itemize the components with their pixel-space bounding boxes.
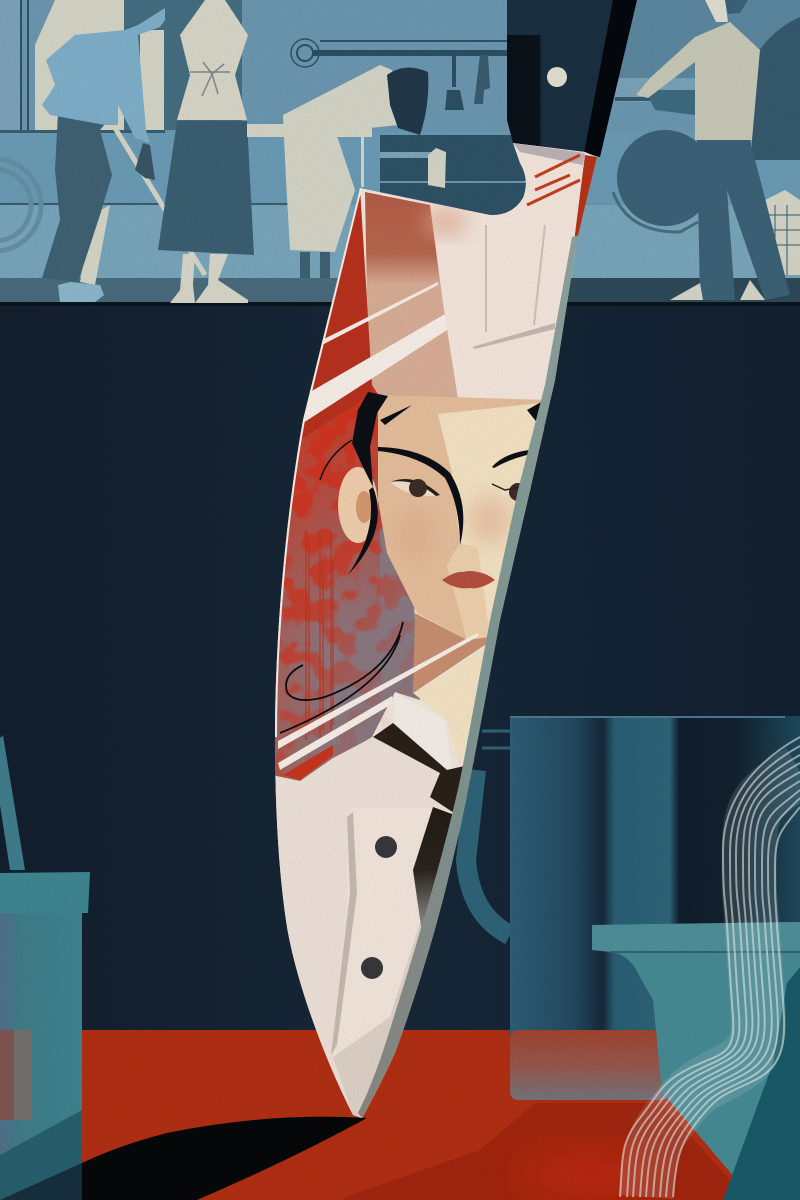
blade crack highlights bbox=[278, 282, 479, 770]
eyes bbox=[390, 479, 440, 496]
arched window left bbox=[35, 0, 165, 130]
chef face bbox=[320, 392, 557, 767]
blade left edge bbox=[275, 188, 360, 737]
lower panel bbox=[333, 920, 440, 1118]
hair wisps bbox=[280, 622, 403, 733]
chef hair bbox=[352, 392, 388, 487]
chef hat bbox=[365, 143, 597, 412]
right figure with bowl bbox=[636, 0, 790, 300]
red scribble bbox=[283, 745, 333, 780]
bright red glow bbox=[520, 1155, 660, 1195]
utensil stick left bbox=[0, 735, 25, 870]
ear bbox=[338, 467, 378, 543]
dark front shape bbox=[723, 967, 800, 1200]
red wedge of reflection bbox=[300, 188, 373, 440]
black shadow on counter bbox=[82, 1117, 367, 1200]
steam wisps bbox=[620, 737, 800, 1197]
person mopping bbox=[42, 8, 205, 302]
collar bbox=[393, 692, 452, 772]
lips bbox=[442, 571, 495, 588]
dark wall background bbox=[0, 303, 800, 1033]
bowl right bbox=[592, 922, 800, 1200]
stove bbox=[380, 135, 530, 215]
chef jacket bbox=[272, 692, 480, 1125]
red wash bbox=[282, 386, 380, 620]
wall table and rail bbox=[247, 39, 508, 187]
person bending bbox=[283, 65, 428, 278]
large pot right bbox=[510, 716, 800, 1100]
right wall bbox=[615, 0, 800, 275]
kitchen scene band bbox=[0, 0, 800, 306]
red speckles bbox=[270, 400, 420, 780]
handle rivet bbox=[547, 67, 567, 87]
container left bbox=[0, 872, 90, 1200]
red counter bbox=[0, 1030, 800, 1200]
jacket buttons bbox=[375, 836, 397, 858]
blade right bevel bbox=[358, 157, 597, 1118]
purple grey reflection bbox=[270, 380, 420, 800]
red drips bbox=[306, 530, 333, 745]
dark opening behind figure bbox=[124, 0, 242, 130]
person in skirt bbox=[158, 0, 254, 303]
washer left bbox=[0, 159, 41, 251]
knife handle bbox=[507, 0, 637, 157]
knife scratches bbox=[527, 155, 580, 205]
knife blade bbox=[270, 143, 597, 1125]
pot handle bbox=[466, 731, 510, 935]
placket bbox=[333, 924, 420, 1057]
meat on counter bbox=[345, 1103, 745, 1200]
neck bbox=[413, 613, 503, 693]
washer right bbox=[613, 130, 713, 232]
chef tie bbox=[373, 723, 477, 817]
